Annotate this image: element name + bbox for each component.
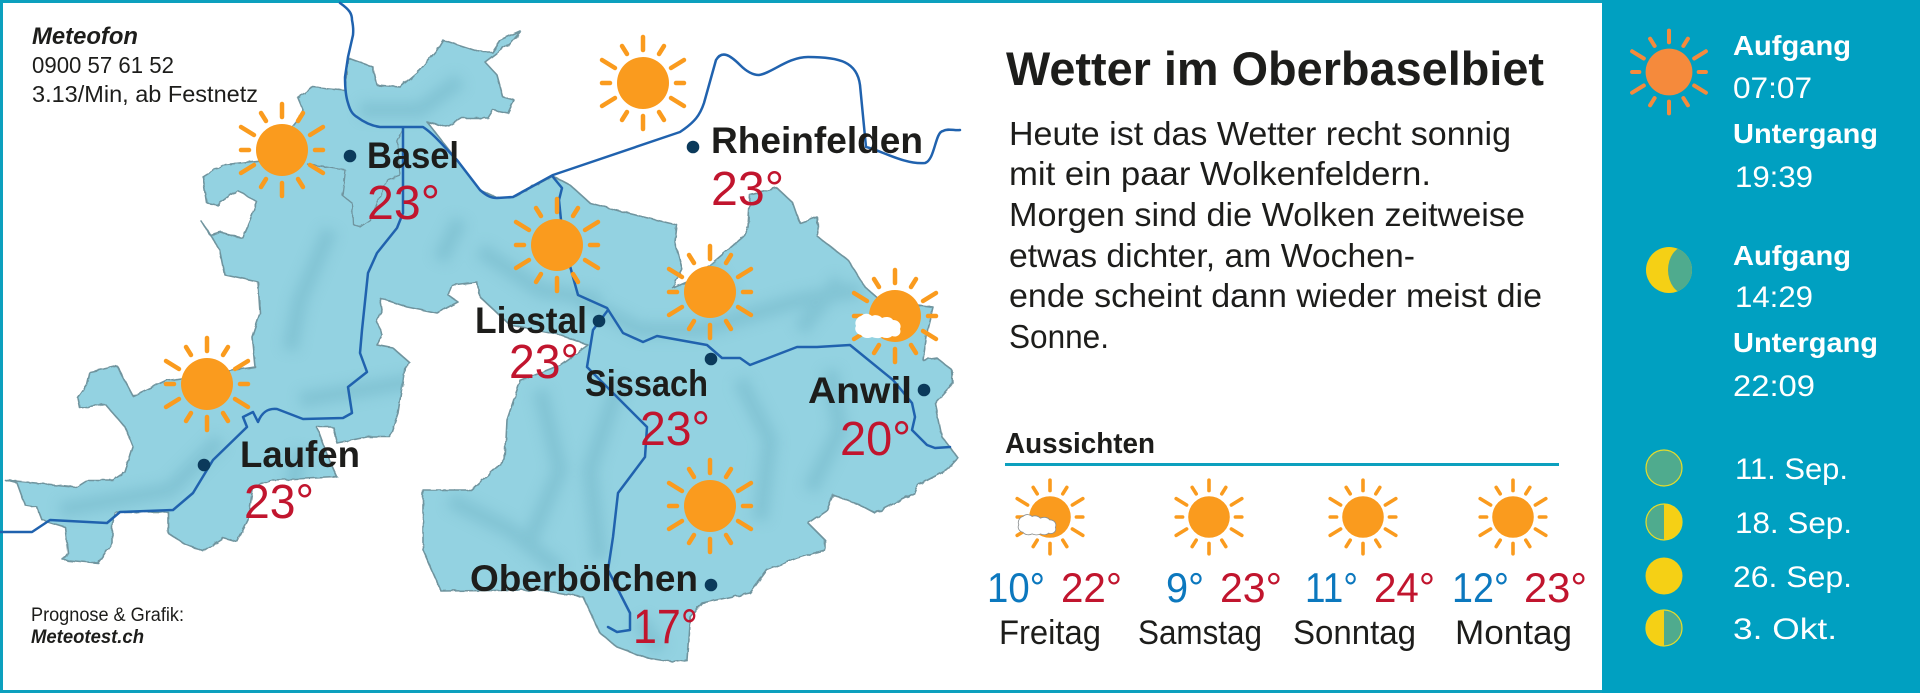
forecast: Sonntag: 24° [1374,564,1435,611]
text block: forecast description: etwas dichter, am Wochen- [1009,237,1415,274]
river: Rhine [340,3,960,198]
city: Oberbölchen: 17° [633,601,698,654]
city: Basel: 23° [367,177,440,230]
city: Anwil: Anwil [808,370,912,411]
moon phase: new moon: 11. Sep. [1735,453,1848,486]
info: Meteofon [32,23,258,107]
text block: forecast description: Heute ist das Wetter recht sonnig [1009,115,1511,152]
moon times: 22:09 [1733,370,1815,403]
sun times: Aufgang [1733,30,1851,61]
forecast: Sonntag: 11° [1305,564,1358,611]
credit: Meteotest: Meteotest.ch [31,627,144,648]
forecast: Samstag: 23° [1220,564,1282,611]
info: Meteofon: 0900 57 61 52 [32,52,174,78]
city: Liestal [475,300,605,389]
info: Meteofon: 3.13/Min, ab Festnetz [32,81,258,107]
forecast: Montag: 23° [1524,564,1587,611]
city: Sissach [585,353,717,456]
heading: Aussichten: Aussichten [1005,428,1155,460]
city: Rheinfelden: 23° [711,163,784,216]
land shape [5,31,958,662]
land relief shading [60,80,860,650]
city: Laufen: 23° [244,476,314,529]
city: Liestal: Liestal [475,300,587,341]
forecast: Sonntag: Sonntag [1293,614,1416,652]
forecast: Samstag [1138,480,1282,652]
moon phase: first quarter [1646,504,1852,540]
moon times: Untergang [1733,327,1878,358]
city: Anwil [808,370,930,466]
sun times: 07:07 [1733,72,1812,105]
icon: sun over Liestal [516,199,598,291]
city: Rheinfelden: Rheinfelden [711,120,923,161]
city: Sissach: 23° [640,403,710,456]
city: Anwil: 20° [840,413,911,466]
city: Basel [344,135,459,230]
info: Meteofon: Meteofon [32,23,138,50]
sun times: Untergang [1733,118,1878,149]
icon: sun over Oberbölchen [669,460,751,552]
city: Laufen [198,434,360,529]
river: Ergolz [553,177,950,448]
city: Basel: Basel [367,135,459,176]
heading: Aussichten [1005,428,1559,466]
text block: forecast description: ende scheint dann wieder meist die [1009,277,1542,314]
moon phase: first quarter: 18. Sep. [1735,507,1852,540]
text block: forecast description: Morgen sind die Wolken zeitweise [1009,196,1525,233]
city: Laufen: Laufen [240,434,360,475]
forecast: Freitag: 10° [987,564,1045,611]
sun times [1733,30,1878,194]
river: Birs [0,128,403,532]
icon: sun over Sissach north [669,246,751,338]
city: Liestal: 23° [509,336,579,389]
forecast: Freitag [987,480,1122,652]
icon: sidebar sun [1632,31,1706,113]
moon times: Aufgang [1733,240,1851,271]
moon phase: last quarter: 3. Okt. [1733,613,1837,646]
icon: sun with cloud over Anwil [854,270,936,362]
forecast: Samstag: Samstag [1138,614,1262,652]
forecast: Sonntag [1293,480,1435,652]
moon phase: new moon [1646,450,1848,486]
sun times: 19:39 [1735,161,1813,194]
city: Oberbölchen: Oberbölchen [470,558,698,599]
city: Sissach: Sissach [585,363,708,404]
moon times: 14:29 [1735,281,1813,314]
rivers [0,3,960,632]
text block: forecast description: Sonne. [1009,318,1109,355]
moon phase: full moon: 26. Sep. [1733,561,1852,594]
panel: sun and moon sidebar [1602,0,1920,693]
forecast: Freitag: Freitag [999,614,1101,652]
text block: forecast description: mit ein paar Wolkenfeldern. [1009,155,1431,192]
moon phase: last quarter [1646,610,1837,646]
icon: sun over Rheinfelden [602,37,684,129]
forecast: Samstag: 9° [1166,564,1204,611]
icon: sun over Basel [241,104,323,196]
map: Oberbaselbiet region [0,3,960,662]
credit: Meteotest: Prognose & Grafik: [31,605,184,626]
title: Wetter im Oberbaselbiet [1006,42,1544,95]
icon: current moon phase [1646,247,1692,293]
credit: Meteotest [31,605,184,648]
city: Oberbölchen [470,558,717,654]
forecast: Montag: Montag [1455,614,1572,652]
moon times [1733,240,1878,403]
moon phase: full moon [1646,558,1852,594]
forecast: Montag [1452,480,1587,652]
forecast: Freitag: 22° [1061,564,1122,611]
city: Rheinfelden [687,120,923,216]
text block: forecast description [1009,115,1542,355]
icon: sun over Laufen [166,338,248,430]
river: Homburgerbach [587,310,647,632]
forecast: Montag: 12° [1452,564,1509,611]
